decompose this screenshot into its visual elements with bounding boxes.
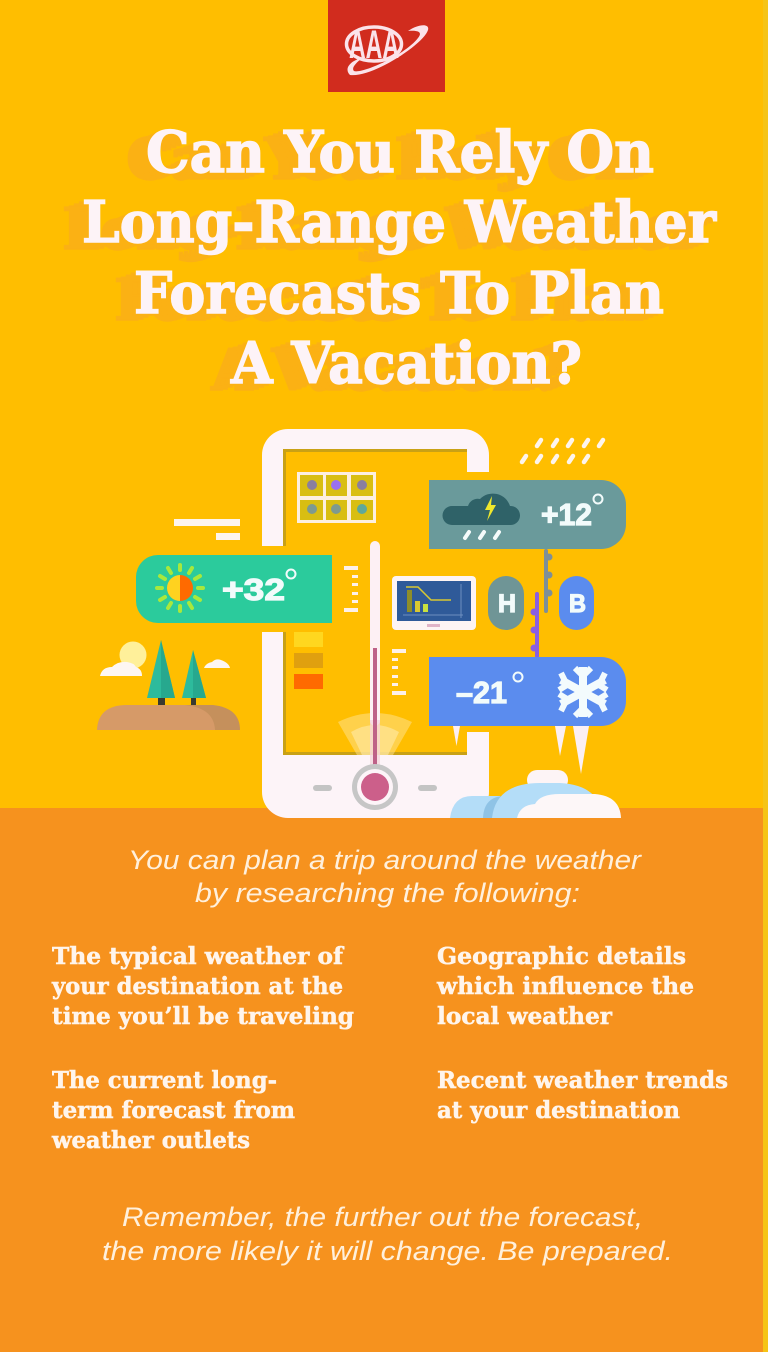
tree right <box>182 650 206 705</box>
H button: H <box>498 590 516 618</box>
tip: recent trends: Recent weather trends <box>437 1067 728 1094</box>
title: Can You Rely On <box>146 118 654 186</box>
title: Forecasts To Plan <box>124 263 654 331</box>
green panel +32 <box>136 555 332 623</box>
title: A Vacation? <box>210 336 562 404</box>
tip: recent trends <box>437 1067 728 1124</box>
title: Long-Range Weather <box>67 194 702 262</box>
title: Can You Rely On <box>141 120 649 188</box>
tip: typical weather: The typical weather of <box>52 943 345 970</box>
H button <box>488 576 524 630</box>
title: Can You Rely On <box>131 124 639 192</box>
tip: typical weather: time you’ll be traveling <box>52 1003 354 1030</box>
AAA logo: AAA <box>349 23 399 67</box>
title <box>62 118 717 404</box>
title: Long-Range Weather <box>62 195 697 263</box>
tree left <box>147 640 175 705</box>
mountain landscape <box>97 640 240 730</box>
AAA logo <box>328 0 445 92</box>
ruler ticks lower <box>392 649 406 695</box>
title: A Vacation? <box>220 333 572 401</box>
tip: recent trends: at your destination <box>437 1097 680 1124</box>
tip: long-term forecast: The current long- <box>52 1067 277 1094</box>
ruler ticks upper <box>344 566 358 612</box>
phone <box>258 429 494 818</box>
title: Long-Range Weather <box>72 192 707 260</box>
rain dashes <box>522 440 603 462</box>
title: A Vacation? <box>215 335 567 403</box>
sun icon <box>157 565 203 611</box>
colour swatches <box>294 632 323 689</box>
tip: geographic details: local weather <box>437 1003 613 1030</box>
teal panel +12 <box>429 480 626 549</box>
B button <box>559 576 594 630</box>
intro text: You can plan a trip around the weather <box>128 845 642 875</box>
tip: geographic details: Geographic details <box>437 943 686 970</box>
blue panel -21: –21 <box>456 675 507 710</box>
app grid icon <box>297 472 376 523</box>
white dashes <box>174 519 240 540</box>
closing text: the more likely it will change. Be prepared. <box>102 1236 673 1266</box>
title: Forecasts To Plan <box>134 259 664 327</box>
closing text: Remember, the further out the forecast, <box>122 1202 643 1232</box>
title: Long-Range Weather <box>82 188 717 256</box>
title: Long-Range Weather <box>77 190 712 258</box>
B button: B <box>569 590 586 618</box>
tip: geographic details <box>436 943 694 1030</box>
intro text: by researching the following: <box>195 878 580 908</box>
connector teal <box>544 549 552 613</box>
title: A Vacation? <box>225 331 577 399</box>
tip: typical weather: your destination at the <box>51 973 343 1000</box>
bottom orange panel <box>0 808 763 1352</box>
teal panel +12: +12 <box>541 497 592 532</box>
tip: geographic details: which influence the <box>436 973 694 1000</box>
green panel +32: +32 <box>222 572 285 607</box>
tip: long-term forecast: term forecast from <box>52 1097 295 1124</box>
title: A Vacation? <box>230 329 582 397</box>
sun <box>120 642 146 668</box>
title: Forecasts To Plan <box>114 266 644 334</box>
mound <box>97 705 240 730</box>
snowy clouds <box>450 770 621 818</box>
closing text <box>102 1202 673 1266</box>
blue panel -21 <box>429 657 626 726</box>
beam fan <box>338 713 412 755</box>
title: Forecasts To Plan <box>119 265 649 333</box>
tip: typical weather <box>51 943 354 1030</box>
title: Can You Rely On <box>126 125 634 193</box>
tablet chart <box>392 576 476 630</box>
cloud left <box>100 662 142 676</box>
tip: long-term forecast <box>51 1067 295 1154</box>
tip: long-term forecast: weather outlets <box>51 1127 250 1154</box>
icicles <box>453 726 589 774</box>
cloud right <box>204 659 230 668</box>
title: Forecasts To Plan <box>129 261 659 329</box>
intro text <box>128 845 642 908</box>
thermometer <box>352 541 398 810</box>
connector purple <box>530 592 539 658</box>
storm cloud icon <box>442 494 520 538</box>
snowflake icon <box>559 667 607 717</box>
title: Can You Rely On <box>136 122 644 190</box>
